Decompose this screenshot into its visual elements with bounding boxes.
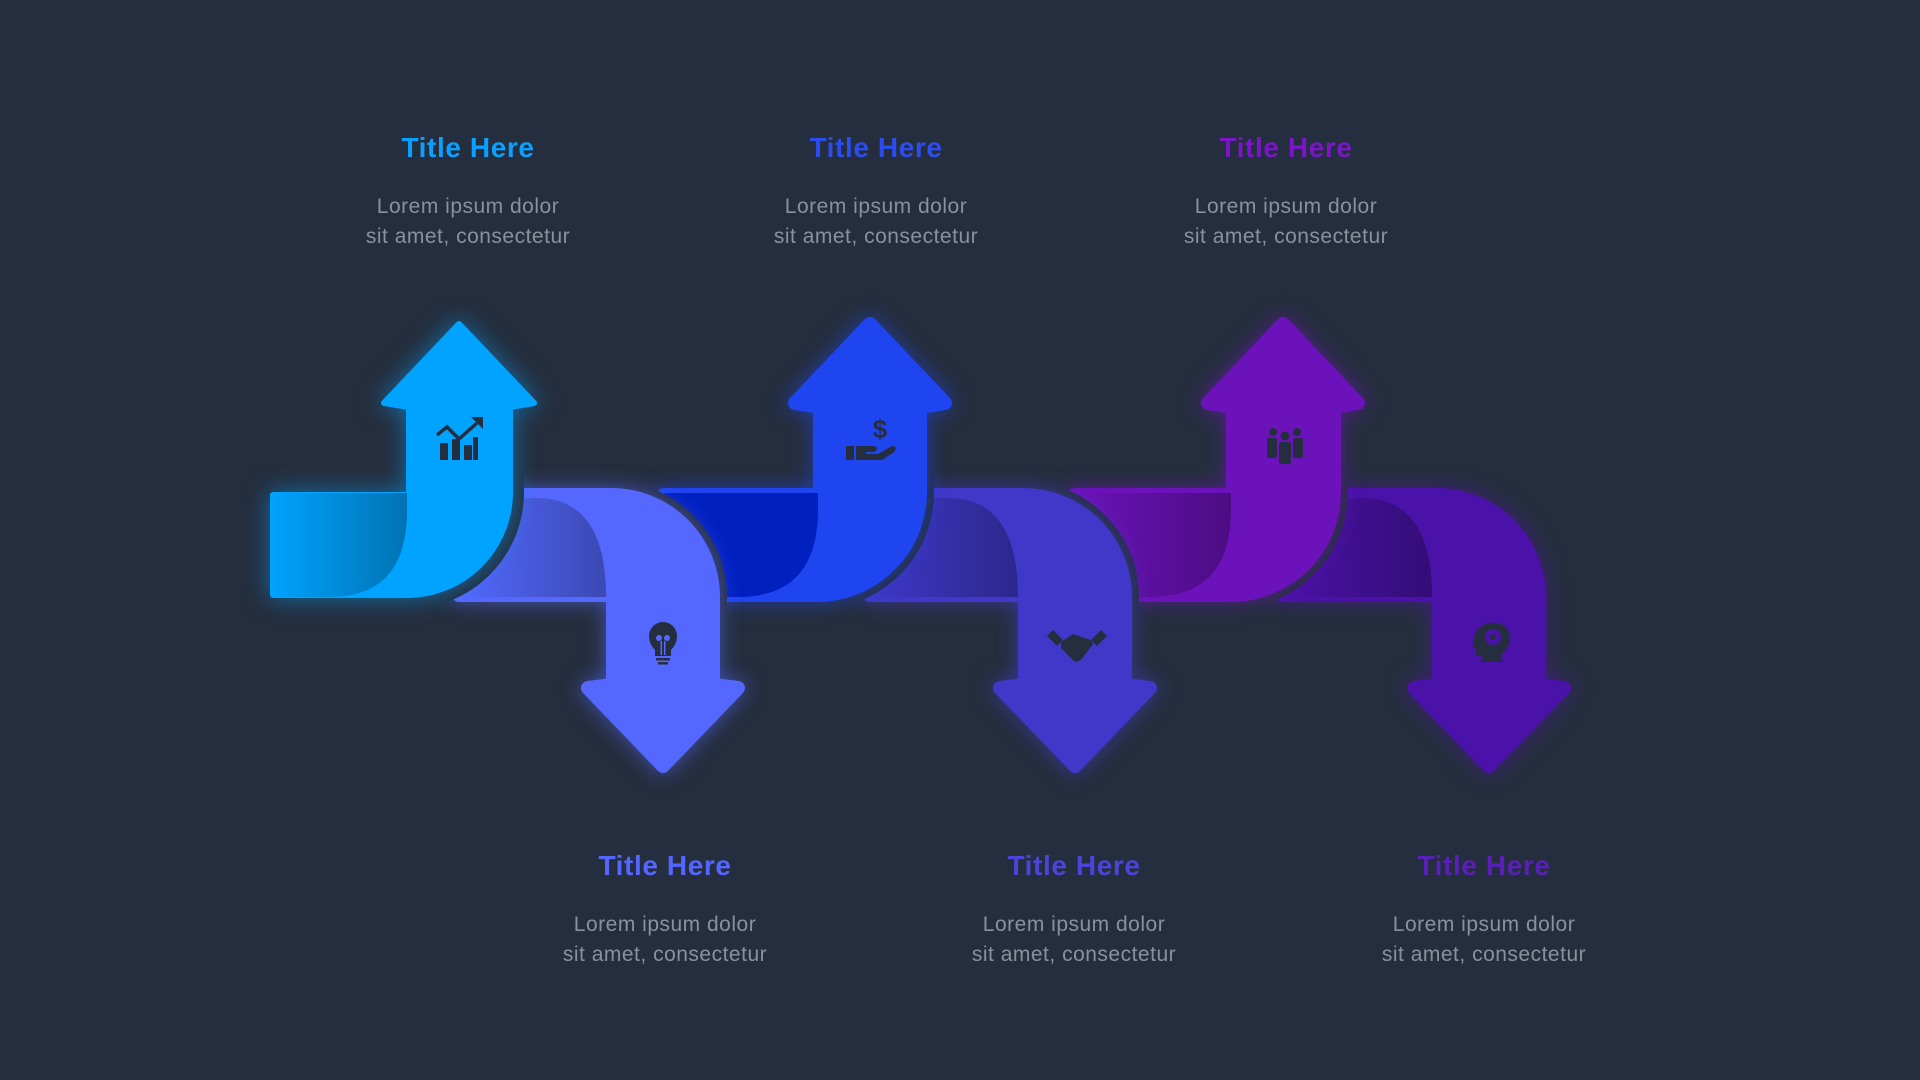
text block 5: sit amet, consectetur — [1184, 225, 1388, 248]
text block 6: sit amet, consectetur — [1382, 943, 1586, 966]
text block 2: sit amet, consectetur — [563, 943, 767, 966]
text block 4: Title Here — [1007, 850, 1141, 881]
icon: dollar hand — [846, 414, 896, 460]
text block 3: Title Here — [809, 132, 943, 163]
text block 1: sit amet, consectetur — [366, 225, 570, 248]
text block 5 — [1184, 132, 1388, 248]
text block 1 — [366, 132, 570, 248]
text block 5: Lorem ipsum dolor — [1195, 195, 1377, 218]
text block 3: sit amet, consectetur — [774, 225, 978, 248]
text block 6: Title Here — [1417, 850, 1551, 881]
icon: handshake — [1047, 630, 1107, 662]
icon: head gear — [1472, 623, 1510, 662]
icon: dollar hand: $ — [873, 414, 888, 444]
arrow 1 up — [270, 324, 534, 597]
text block 1: Title Here — [401, 132, 535, 163]
text block 5: Title Here — [1219, 132, 1353, 163]
arrow 2 down — [459, 493, 738, 766]
icon: team — [1267, 428, 1303, 464]
text block 2 — [563, 850, 767, 966]
text block 6: Lorem ipsum dolor — [1393, 913, 1575, 936]
text block 4 — [972, 850, 1176, 966]
text block 6 — [1382, 850, 1586, 966]
arrow 3 up — [664, 324, 945, 597]
text block 2: Title Here — [598, 850, 732, 881]
icon: bulb — [649, 622, 677, 664]
text block 2: Lorem ipsum dolor — [574, 913, 756, 936]
icon: growth chart — [437, 417, 483, 460]
text block 4: Lorem ipsum dolor — [983, 913, 1165, 936]
text block 4: sit amet, consectetur — [972, 943, 1176, 966]
arrow 6 down — [1282, 493, 1564, 766]
text block 3 — [774, 132, 978, 248]
text block 3: Lorem ipsum dolor — [785, 195, 967, 218]
arrow 4 down — [870, 493, 1150, 766]
text block 1: Lorem ipsum dolor — [377, 195, 559, 218]
arrow 5 up — [1075, 324, 1358, 597]
